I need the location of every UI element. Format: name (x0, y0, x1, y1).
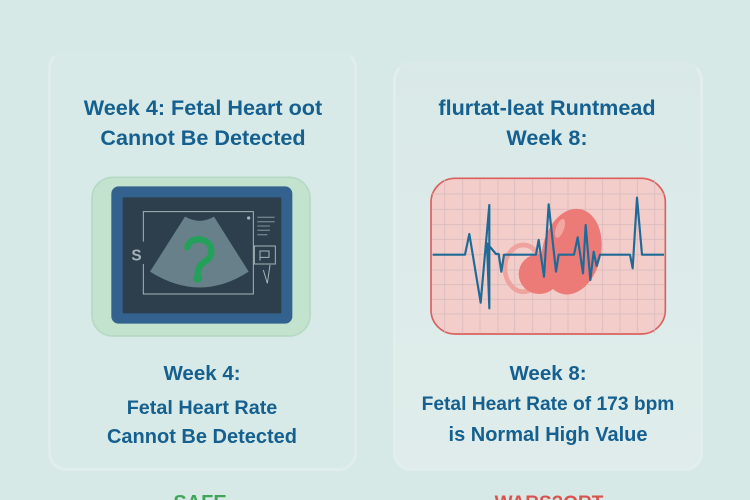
text: week 4 result: Week 4: (163, 362, 241, 385)
heading: week 4 (84, 95, 322, 150)
text: week 4 result (107, 362, 297, 448)
icon: ultrasound monitor (91, 176, 311, 337)
heading: week 4: Week 4: Fetal Heart oot (84, 95, 322, 120)
icon: ultrasound monitor: S (131, 248, 142, 265)
text: week 8 result: Fetal Heart Rate of 173 bpm (422, 394, 674, 415)
text: week 8 result: Week 8: (509, 362, 587, 385)
heading: week 8: flurtat-leat Runtmead (438, 95, 656, 120)
icon: heart rate monitor (430, 178, 666, 335)
text: week 4 result: Fetal Heart Rate (127, 397, 277, 419)
heading: week 4: Cannot Be Detected (100, 125, 306, 150)
panel: week 4 (48, 50, 357, 471)
icon: heart (505, 203, 609, 300)
panel: week 8 (393, 62, 703, 471)
heading: week 8: Week 8: (506, 125, 588, 150)
heading: week 8 (438, 95, 656, 150)
text: week 4 result: Cannot Be Detected (107, 426, 297, 448)
text: week 8 result (422, 362, 674, 446)
text: week 8 result: is Normal High Value (449, 424, 647, 446)
